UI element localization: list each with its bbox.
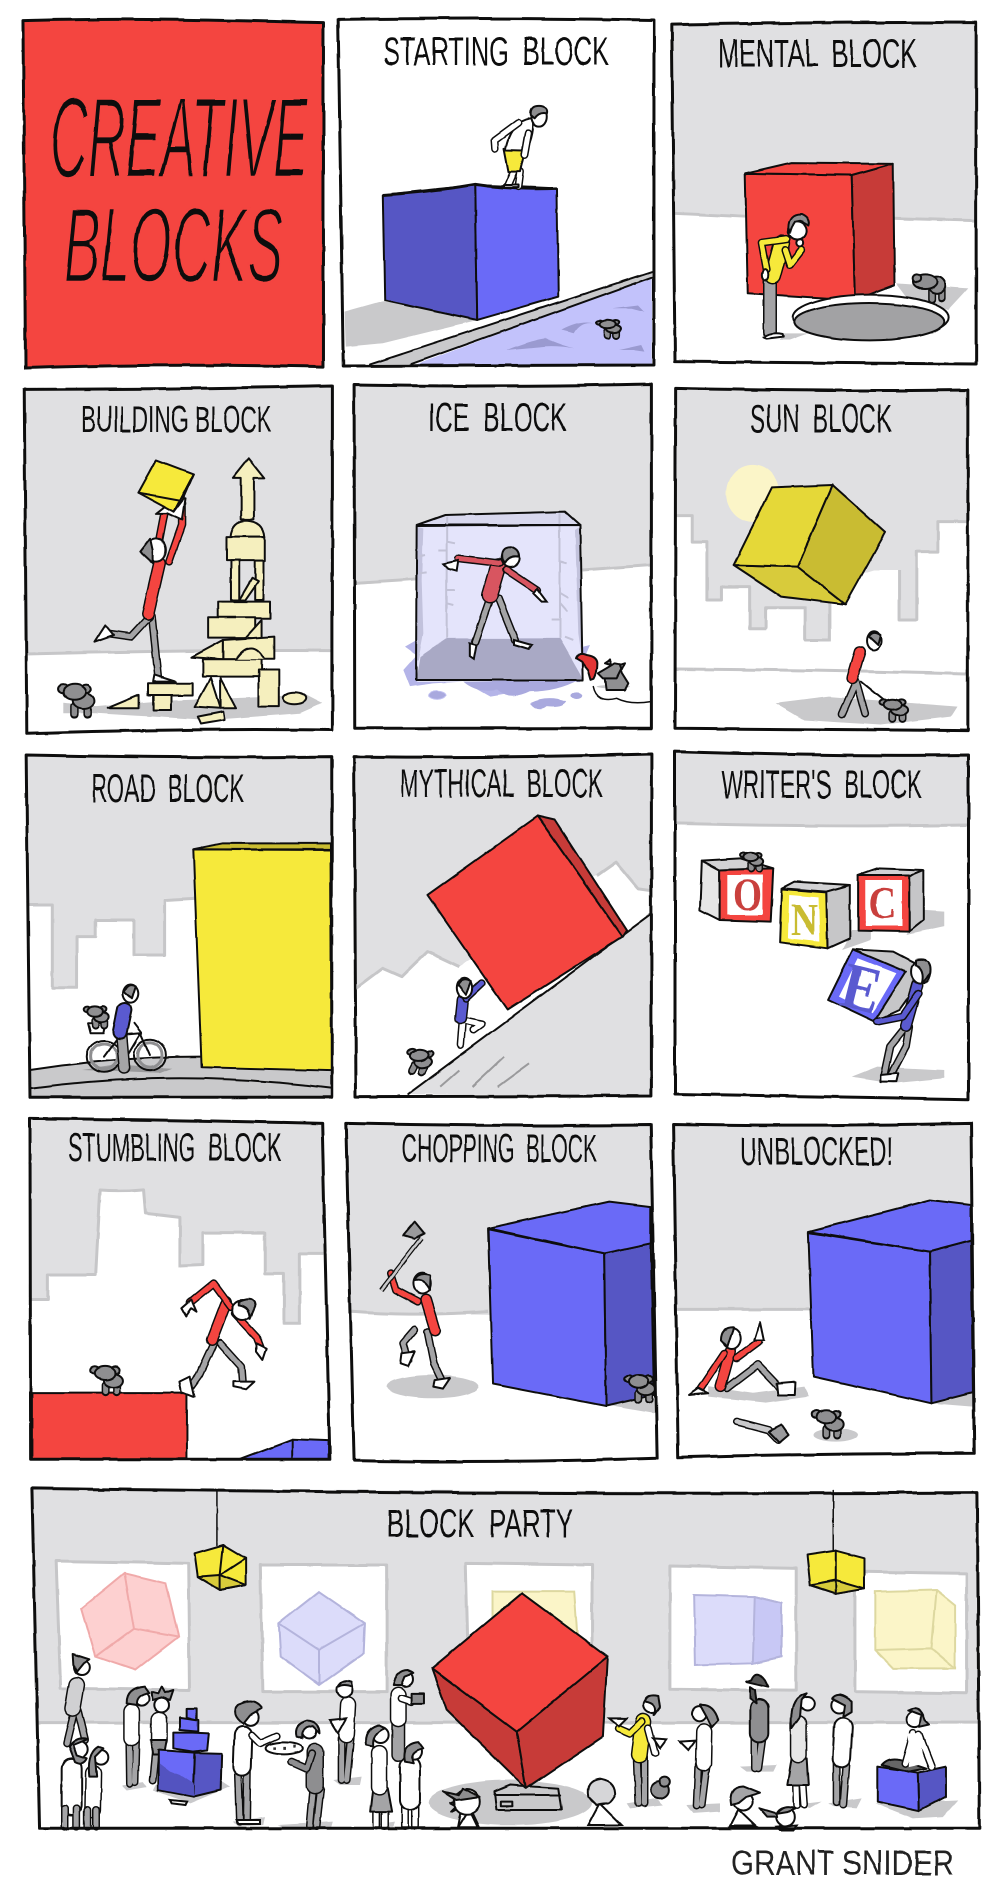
starting block frame [338,18,654,366]
panel: Ice Block [354,384,651,728]
panel: Mythical Block [354,754,651,1097]
block party scene [32,1488,979,1828]
left visitors and blue stacked sculpture [65,1654,478,1827]
text: CREATIVE [50,75,309,202]
mental block scene [672,23,976,364]
letter blocks O N C E: C [869,877,896,928]
panel: Sun Block [675,388,968,731]
gallery paintings [56,1561,967,1693]
big red cube [432,1593,607,1788]
mythical block frame [354,754,651,1097]
title panel background [23,19,323,368]
building block scene [24,386,332,733]
right visitors, dog and blue pedestal [588,1674,958,1830]
panel: Unblocked! [673,1123,974,1457]
letter blocks O N C E [733,869,896,1029]
chopping block scene [346,1123,657,1461]
centre child and frame [32,1488,979,1828]
sun block scene [675,388,968,731]
signature: Grant Snider: GRANT SNIDER [731,1844,954,1883]
letter blocks O N C E: E [834,949,889,1029]
unblocked frame [673,1123,974,1457]
heading: Block Party: BLOCK PARTY [387,1502,573,1546]
mythical block scene [354,754,651,1097]
heading: Road Block: ROAD BLOCK [91,767,244,811]
heading: Mythical Block: MYTHICAL BLOCK [400,762,603,806]
unblocked scene [673,1123,974,1457]
heading: Building Block: BUILDING BLOCK [81,399,272,440]
sun block frame [675,388,968,731]
road block scene [26,755,332,1097]
starting block scene [338,19,654,366]
stumbling block scene [30,1118,330,1459]
panel: Starting Block [338,18,654,366]
heading: Sun Block: SUN BLOCK [750,397,892,441]
blue stacked sculpture [158,1708,222,1805]
heading: Chopping Block: CHOPPING BLOCK [402,1127,597,1171]
panel: Mental Block [672,23,976,364]
hanging lanterns [195,1490,864,1593]
panel: Building Block [24,386,332,733]
panel: Block Party [32,1488,979,1830]
panel: Road Block [26,755,332,1097]
heading: Starting Block: STARTING BLOCK [383,30,609,74]
ice block frame [354,384,651,728]
letter blocks O N C E: O [733,869,762,920]
ice cube, frozen man, hair dryer and dog [403,512,651,709]
stumbling block frame [30,1118,330,1459]
heading: Ice Block: ICE BLOCK [428,396,567,440]
plinth [429,1780,592,1825]
chopping block frame [346,1123,657,1462]
panel: Writer's Block [675,752,968,1099]
writer's block frame [675,752,968,1099]
ice block background [354,384,651,728]
title: BLOCKS: BLOCKS [64,185,283,305]
panel: Creative Blocks title [23,19,323,368]
heading: Unblocked!: UNBLOCKED! [740,1130,893,1174]
road block frame [26,755,332,1097]
panel: Chopping Block [346,1123,657,1462]
writer's block scene [675,752,968,1099]
panel: Stumbling Block [30,1118,330,1459]
building block frame [24,386,332,733]
letter blocks O N C E: N [791,894,818,945]
mental block frame [672,23,976,364]
manhole, dog and man [762,214,968,340]
heading: Stumbling Block: STUMBLING BLOCK [68,1126,282,1170]
